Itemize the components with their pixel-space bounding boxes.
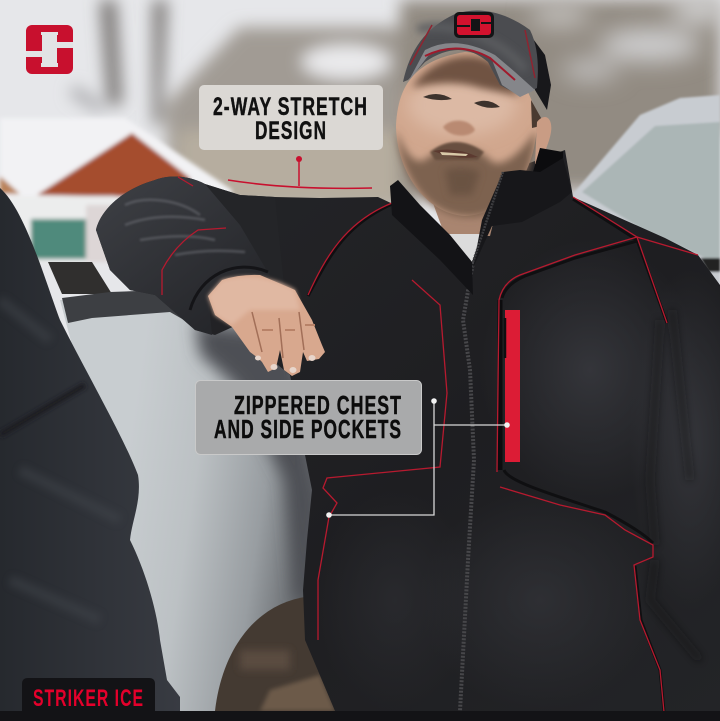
cap	[403, 11, 551, 110]
stretch indicator: red pin and curve	[228, 156, 372, 188]
shadow on truck under hand and jacket	[195, 322, 318, 600]
cap logo	[454, 12, 494, 38]
shadow under cap brim	[412, 56, 520, 96]
callout: zippered chest and side pockets: AND SIDE POCKETS	[214, 414, 402, 444]
product name tag	[22, 678, 155, 712]
sleeve wrinkles	[125, 200, 245, 255]
knuckle creases	[262, 325, 315, 330]
collar	[390, 148, 572, 295]
red stitching	[162, 177, 698, 712]
truck bed	[48, 262, 335, 711]
cuff fold	[190, 267, 268, 310]
logo	[26, 25, 73, 74]
chest and sleeve tone	[480, 240, 700, 500]
nose	[443, 121, 475, 136]
nails	[255, 355, 316, 373]
bottom band	[0, 711, 720, 721]
chest pocket zipper	[505, 310, 520, 462]
callout: zippered chest and side pockets: ZIPPERED CHEST	[234, 390, 402, 420]
callout: zippered chest and side pockets	[196, 380, 422, 454]
cap brim edge	[408, 43, 535, 97]
jacket	[96, 150, 720, 712]
stubble	[396, 130, 536, 217]
product name tag: STRIKER ICE	[33, 685, 144, 712]
cap stitching	[410, 25, 535, 78]
hand	[208, 275, 325, 376]
center zipper	[460, 262, 474, 711]
dark seam bands	[308, 199, 667, 711]
mouth	[433, 149, 478, 158]
finger separations	[252, 312, 304, 358]
head and face	[396, 52, 551, 236]
ear and hair	[531, 100, 545, 128]
upper arm tone	[205, 184, 285, 295]
forearm sleeve	[96, 177, 270, 335]
callout: 2-way stretch design	[199, 85, 383, 150]
foreground person's shoulder	[0, 188, 180, 711]
callout: 2-way stretch design: 2-WAY STRETCH	[213, 93, 368, 121]
vehicle on right	[572, 95, 720, 285]
zipper pull	[504, 318, 506, 358]
shirt	[448, 234, 482, 262]
sleeve crease at right	[650, 310, 700, 660]
chest pocket opening	[498, 300, 502, 470]
pocket leader lines	[326, 398, 510, 518]
callout: 2-way stretch design: DESIGN	[255, 117, 327, 145]
eyes	[423, 94, 452, 100]
